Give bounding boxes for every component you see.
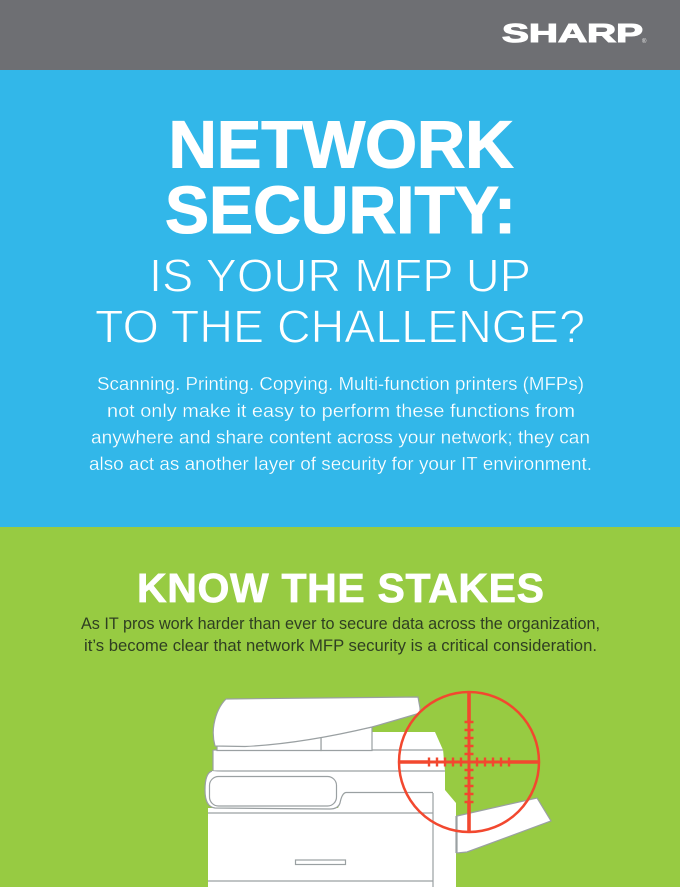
printer document feeder base [321,727,372,750]
printer output tray [457,798,551,853]
printer scanner lid [213,697,420,746]
title: NETWORK [168,108,514,182]
heading: KNOW THE STAKES [137,565,544,611]
body text: it’s become clear that network MFP security is a critical consideration. [84,637,597,655]
body text: As IT pros work harder than ever to secure data across the organization, [81,615,600,633]
intro text: also act as another layer of security for your IT environment. [89,454,592,474]
logo: SHARP: ® [642,38,647,45]
printer paper slot [296,860,346,864]
intro text [89,374,592,474]
logo: SHARP: SHARP [502,18,643,48]
intro text: Scanning. Printing. Copying. Multi-function printers (MFPs) [97,374,584,394]
printer main body [208,793,433,887]
illustration: printer [205,697,551,887]
printer side panel [433,790,456,887]
panel: intro [0,70,680,527]
title [165,108,516,248]
subtitle: IS YOUR MFP UP [149,250,531,302]
logo: SHARP [502,18,647,48]
printer back block [372,732,445,793]
printer control panel [210,776,336,806]
intro text: not only make it easy to perform these functions from [107,401,575,421]
intro text: anywhere and share content across your network; they can [91,428,590,448]
panel: header band [0,0,680,70]
subtitle: TO THE CHALLENGE? [95,300,585,352]
icon: crosshair [399,692,539,832]
panel: know the stakes [0,527,680,887]
subtitle [95,250,585,352]
printer scanner body [213,750,445,809]
title: SECURITY: [165,173,516,248]
body text [81,615,600,655]
printer control console [205,771,433,809]
